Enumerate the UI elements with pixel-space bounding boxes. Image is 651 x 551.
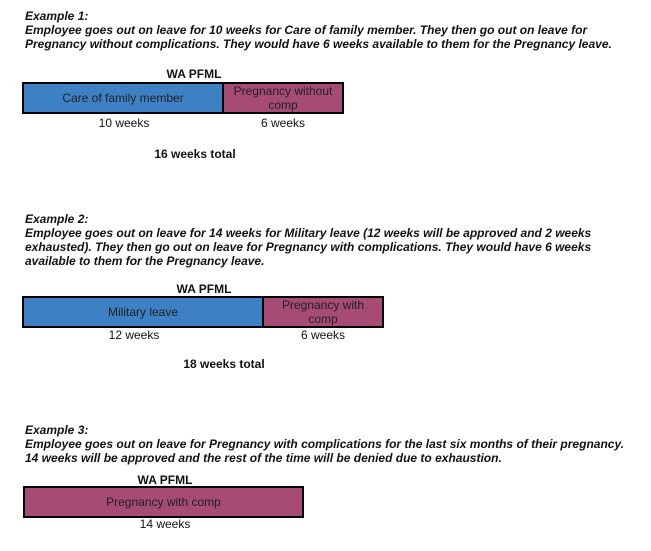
text block: example 2 description: Example 2: <box>25 212 88 226</box>
label: 6 weeks: 6 weeks <box>301 328 345 342</box>
bar segment: pregnancy with comp: Pregnancy with <box>282 298 364 312</box>
bar segment: pregnancy with comp: comp <box>308 312 338 326</box>
label: 6 weeks: 6 weeks <box>261 116 305 130</box>
bar segment: pregnancy without comp <box>222 82 344 114</box>
bar segment: military leave <box>22 296 264 328</box>
total: 16 weeks: 16 weeks total <box>154 147 236 161</box>
text block: example 2 description: Employee goes out on leave for 14 weeks for Military leave (12 weeks will be approved and 2 weeks <box>25 226 591 240</box>
text block: example 3 description <box>25 423 624 465</box>
text block: example 3 description: 14 weeks will be approved and the rest of the time will be denied due to exhaustion. <box>25 451 502 465</box>
label: 12 weeks: 12 weeks <box>109 328 159 342</box>
text block: example 1 description <box>25 9 612 51</box>
bar segment: pregnancy without comp: Pregnancy without <box>234 84 332 98</box>
bar segment: military leave: Military leave <box>108 305 178 319</box>
text block: example 1 description: Pregnancy without complications. They would have 6 weeks available to them for the Pregnancy leave. <box>25 37 612 51</box>
bar chart: example 3 timeline: Pregnancy with comp <box>106 495 221 509</box>
bar segment: pregnancy without comp: comp <box>268 98 298 112</box>
total: 18 weeks: 18 weeks total <box>183 357 265 371</box>
bar segment: pregnancy with comp <box>262 296 384 328</box>
text block: example 1 description: Example 1: <box>25 9 88 23</box>
heading: example 1 chart title: WA PFML <box>167 67 221 81</box>
text block: example 2 description: exhausted). They then go out on leave for Pregnancy with complications. They would have 6 weeks <box>25 240 591 254</box>
bar chart: example 3 timeline <box>23 486 304 518</box>
label: 14 weeks: 14 weeks <box>140 517 190 531</box>
heading: example 3 chart title: WA PFML <box>138 473 192 487</box>
bar chart: example 2 timeline <box>22 296 384 328</box>
bar segment: care of family member <box>22 82 224 114</box>
text block: example 3 description: Example 3: <box>25 423 88 437</box>
text block: example 2 description <box>25 212 591 268</box>
heading: example 2 chart title: WA PFML <box>177 282 231 296</box>
text block: example 1 description: Employee goes out on leave for 10 weeks for Care of family member. They then go out on leave for <box>25 23 587 37</box>
label: 10 weeks: 10 weeks <box>99 116 149 130</box>
bar chart: example 1 timeline <box>22 82 344 114</box>
text block: example 2 description: available to them for the Pregnancy leave. <box>25 254 264 268</box>
bar segment: care of family member: Care of family member <box>62 91 184 105</box>
text block: example 3 description: Employee goes out on leave for Pregnancy with complications for the last six months of their pregnancy. <box>25 437 624 451</box>
